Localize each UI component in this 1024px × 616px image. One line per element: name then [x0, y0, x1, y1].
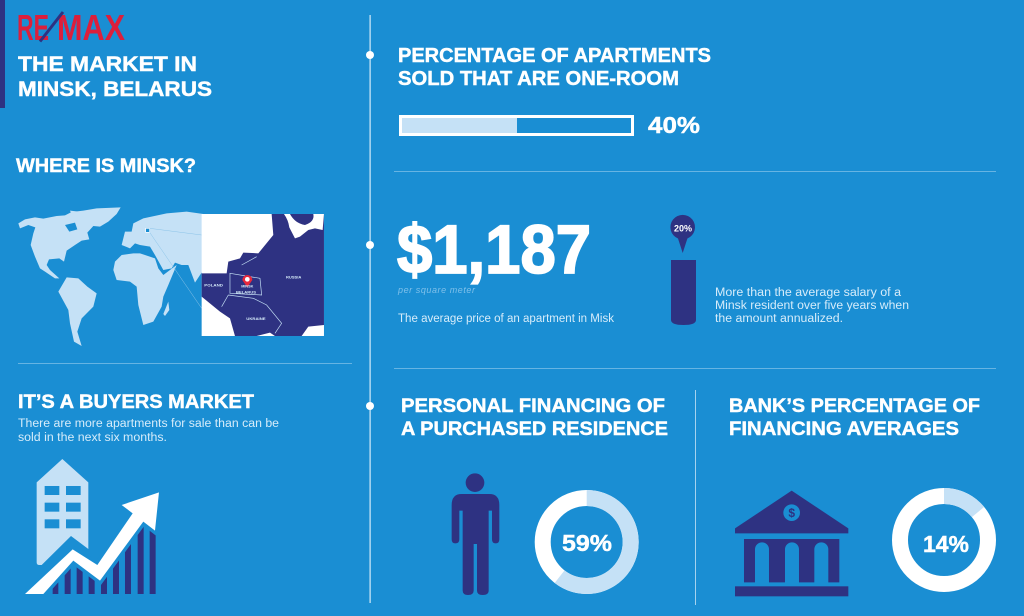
- buyers market text: sold in the next six months.: [18, 432, 167, 444]
- icon: person: [452, 473, 499, 595]
- title: [18, 53, 212, 101]
- logo: RE/MAX: RE: [17, 7, 49, 48]
- world map with inset: [18, 207, 324, 346]
- heading: bank financing: FINANCING AVERAGES: [729, 418, 959, 440]
- heading: bank financing: BANK’S PERCENTAGE OF: [729, 395, 980, 417]
- logo: RE/MAX: [17, 7, 125, 48]
- salary text: the amount annualized.: [715, 313, 843, 325]
- icon: building and rising arrow: [25, 459, 159, 594]
- price per square meter: $1,187: [397, 211, 591, 288]
- heading: one-room apartments: [398, 45, 711, 90]
- inset map of Belarus: RUSSIA: [286, 275, 301, 280]
- heading: personal financing: [401, 395, 668, 440]
- progress bar 40%: [400, 112, 700, 138]
- bars: [53, 526, 156, 594]
- title: MINSK, BELARUS: [18, 78, 212, 101]
- heading: one-room apartments: SOLD THAT ARE ONE-ROOM: [398, 68, 679, 90]
- building: [37, 459, 88, 565]
- inset map of Belarus: POLAND: [204, 283, 223, 288]
- heading: one-room apartments: PERCENTAGE OF APARTMENTS: [398, 45, 711, 67]
- progress bar 40%: 40%: [648, 112, 700, 138]
- world map: [18, 207, 203, 346]
- inset map of Belarus: [202, 214, 324, 336]
- donut chart: 59%: 59%: [562, 530, 612, 556]
- inset map of Belarus: BELARUS: [236, 290, 256, 295]
- logo: RE/MAX: MAX: [57, 7, 125, 48]
- heading: personal financing: A PURCHASED RESIDENCE: [401, 418, 668, 440]
- donut chart: 14%: [900, 496, 988, 584]
- price per square meter: The average price of an apartment in Misk: [398, 313, 614, 325]
- price per square meter: [397, 211, 614, 325]
- icon: 20% pin and column: [670, 215, 696, 325]
- icon: 20% pin and column: 20%: [674, 224, 692, 234]
- heading: where is Minsk: WHERE IS MINSK?: [16, 155, 196, 177]
- salary text: More than the average salary of a: [715, 287, 902, 299]
- salary text: Minsk resident over five years when: [715, 300, 909, 312]
- buyers market text: [18, 418, 279, 444]
- buyers market text: There are more apartments for sale than can be: [18, 418, 279, 430]
- donut chart: 14%: 14%: [923, 531, 969, 557]
- inset map of Belarus: MINSK: [241, 284, 254, 288]
- inset map of Belarus: UKRAINE: [246, 316, 266, 321]
- heading: buyers market: IT’S A BUYERS MARKET: [18, 392, 254, 413]
- icon: bank: $: [788, 506, 795, 520]
- price per square meter: per square meter: [397, 285, 476, 295]
- heading: personal financing: PERSONAL FINANCING OF: [401, 395, 665, 417]
- title: THE MARKET IN: [18, 53, 197, 76]
- icon: bank: [735, 491, 848, 596]
- donut chart: 59%: [543, 498, 631, 586]
- heading: bank financing: [729, 395, 980, 440]
- salary text: [715, 287, 909, 325]
- arrow: [25, 492, 159, 594]
